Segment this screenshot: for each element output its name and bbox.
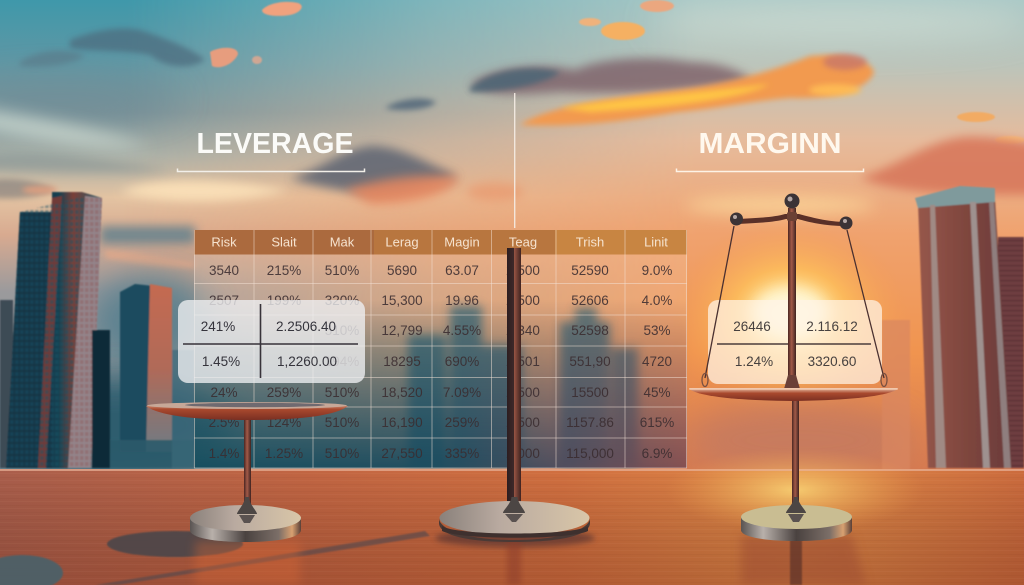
- title: LEVERAGE: LEVERAGE: [196, 128, 354, 160]
- table values: 7.09%: [443, 385, 481, 400]
- wooden desk: [0, 448, 1024, 585]
- table values: 690%: [445, 354, 479, 369]
- right data card: [708, 300, 882, 384]
- left data card: 241%: [201, 319, 235, 334]
- table values: 4.0%: [642, 293, 672, 308]
- right balance scale: [689, 194, 898, 541]
- table values: 19.96: [445, 293, 479, 308]
- table values: 2.5%: [209, 415, 239, 430]
- table values: 615%: [640, 415, 674, 430]
- table values: 4.55%: [443, 323, 481, 338]
- table values: 27,550: [381, 446, 423, 461]
- table values: 215%: [267, 263, 301, 278]
- left data card: 2.2506.40: [276, 319, 336, 334]
- table values: 1.4%: [209, 446, 239, 461]
- table values: 2 501: [506, 354, 540, 369]
- right scale pan: [689, 388, 898, 401]
- scale beam: [738, 214, 846, 226]
- table values: 2 340: [506, 323, 540, 338]
- table header row: Mak: [330, 234, 355, 250]
- table values: 510%: [325, 323, 359, 338]
- left data card: [178, 300, 365, 383]
- scale post: [788, 208, 796, 388]
- right data card: 26446: [733, 319, 771, 334]
- title: MARGINN: [676, 128, 864, 172]
- table values: 5690: [387, 263, 417, 278]
- left data card: 1,2260.00: [277, 354, 337, 369]
- table values: 18,520: [381, 385, 423, 400]
- desk shadows and reflections: [0, 529, 866, 585]
- data table: [194, 230, 687, 468]
- table header row: Linit: [644, 234, 668, 250]
- table values: 1157.86: [566, 415, 614, 430]
- table values: 551,90: [569, 354, 611, 369]
- table values: [209, 263, 674, 461]
- right scale base: [741, 497, 852, 541]
- left skyline: [0, 192, 194, 468]
- divider line: [514, 93, 515, 228]
- left data card: 1.45%: [202, 354, 240, 369]
- table values: 63.07: [445, 263, 479, 278]
- table values: 259%: [267, 385, 301, 400]
- table values: 115,000: [566, 446, 614, 461]
- table values: 124%: [267, 415, 301, 430]
- title: LEVERAGE: [178, 128, 364, 172]
- left scale base: [190, 497, 301, 542]
- title: MARGINN: MARGINN: [698, 128, 842, 160]
- table values: 320%: [325, 293, 359, 308]
- left scale pan: [146, 402, 348, 420]
- table values: 259%: [445, 415, 479, 430]
- table values: 45%: [643, 385, 671, 400]
- table values: 2 500: [506, 385, 540, 400]
- table header row: Teag: [509, 234, 537, 250]
- scale knobs: [730, 194, 852, 230]
- table grid: [194, 230, 687, 468]
- center post and base: [439, 248, 590, 542]
- table city silhouette: [408, 306, 638, 468]
- table values: 194%: [325, 354, 359, 369]
- right skyline: [882, 186, 1024, 470]
- table values: 2 500: [506, 263, 540, 278]
- table values: 199%: [267, 293, 301, 308]
- table values: 510%: [325, 263, 359, 278]
- table header row: Trish: [576, 234, 604, 250]
- table values: 15500: [571, 385, 609, 400]
- table values: 52598: [571, 323, 609, 338]
- table values: 3540: [209, 263, 239, 278]
- right data card: 3320.60: [808, 354, 856, 369]
- table values: 510%: [325, 415, 359, 430]
- table values: 53%: [643, 323, 671, 338]
- table values: 2 000: [506, 446, 540, 461]
- table header row: [194, 230, 687, 254]
- table header row: Magin: [444, 234, 480, 250]
- table values: 510%: [325, 446, 359, 461]
- right data card: 1.24%: [735, 354, 773, 369]
- table values: 12,799: [381, 323, 423, 338]
- table values: 52606: [571, 293, 609, 308]
- table values: 9.0%: [642, 263, 672, 278]
- table values: 2 500: [506, 415, 540, 430]
- table values: 1.25%: [265, 446, 303, 461]
- table header row: Lerag: [385, 234, 419, 250]
- table values: 18295: [383, 354, 421, 369]
- table values: 510%: [325, 385, 359, 400]
- right data card: 2.116.12: [806, 319, 858, 334]
- clouds: [0, 0, 1024, 204]
- table values: 6.9%: [642, 446, 672, 461]
- left scale: [146, 402, 348, 542]
- table values: 15,300: [381, 293, 423, 308]
- table header row: Risk: [211, 234, 237, 250]
- table values: 335%: [445, 446, 479, 461]
- table header row: Slait: [271, 234, 297, 250]
- table values: 16,190: [381, 415, 423, 430]
- table values: 24%: [210, 385, 238, 400]
- table values: 52590: [571, 263, 609, 278]
- table values: 2 500: [506, 293, 540, 308]
- table values: 2507: [209, 293, 239, 308]
- scale chains: [702, 226, 887, 386]
- table values: 4720: [642, 354, 672, 369]
